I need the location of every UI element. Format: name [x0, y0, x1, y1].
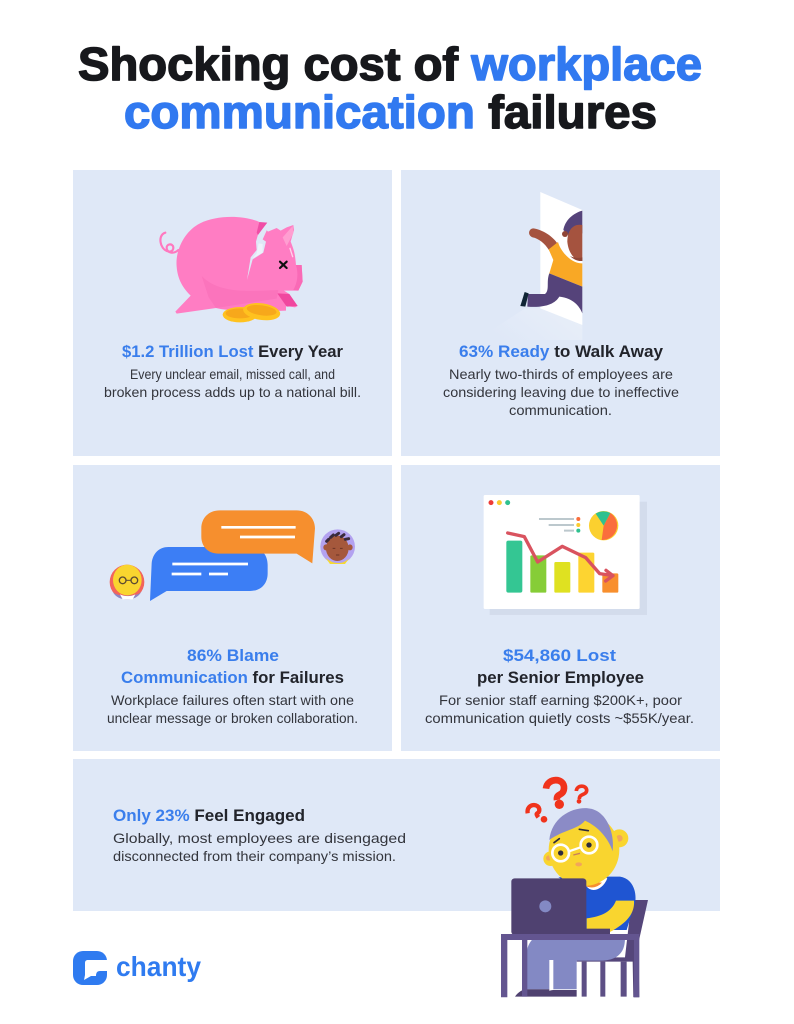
text block [113, 830, 406, 864]
head [610, 829, 628, 847]
heading: per Senior Employee [477, 669, 644, 687]
chair [577, 900, 648, 997]
icon: confused person at laptop [501, 780, 648, 997]
wordmark: chanty [116, 951, 201, 982]
heading [121, 647, 344, 687]
icon: chat logo [73, 951, 108, 985]
heading: $54,860 Lost [503, 647, 617, 665]
legs [526, 938, 625, 989]
text block [425, 692, 694, 726]
icon: dashboard with falling chart [484, 495, 647, 615]
text block: communication. [509, 402, 612, 418]
text block: Nearly two-thirds of employees are [449, 366, 673, 382]
panel: blame communication [73, 465, 392, 751]
text block: considering leaving due to ineffective [443, 384, 679, 400]
icon: chat bubbles with avatars [110, 510, 355, 601]
panel: cost per senior employee [401, 465, 720, 751]
heading: 63% Ready to Walk Away [459, 343, 664, 361]
heading [477, 647, 644, 687]
panel: trillion lost [73, 170, 392, 456]
icon: person leaving through door [477, 192, 582, 340]
torso [558, 877, 636, 930]
title: communication failures [124, 86, 657, 138]
question marks [528, 780, 587, 823]
text block: broken process adds up to a national bill. [104, 384, 361, 400]
text block [443, 366, 679, 418]
heading: 86% Blame [187, 647, 279, 665]
logo: chanty [73, 951, 201, 985]
avatar: yellow [110, 565, 144, 599]
text block: Every unclear email, missed call, and [130, 366, 335, 382]
text block [107, 692, 358, 726]
text block: unclear message or broken collaboration. [107, 710, 358, 726]
heading: $1.2 Trillion Lost Every Year [122, 343, 344, 361]
laptop [511, 878, 610, 935]
text block: disconnected from their company’s mission. [113, 848, 396, 864]
text block: Globally, most employees are disengaged [113, 830, 406, 846]
title: Shocking cost of workplace [78, 38, 702, 90]
avatar: brown [320, 529, 355, 564]
text block: For senior staff earning $200K+, poor [439, 692, 682, 708]
heading: Communication for Failures [121, 669, 344, 687]
blue bubble [150, 547, 268, 601]
text block: Workplace failures often start with one [111, 692, 354, 708]
panel: ready to walk away [401, 170, 720, 456]
desk [501, 934, 639, 997]
orange bubble [201, 510, 315, 563]
text block [104, 366, 361, 400]
text block: communication quietly costs ~$55K/year. [425, 710, 694, 726]
heading: Only 23% Feel Engaged [113, 807, 305, 825]
icon: broken piggy bank [160, 217, 303, 323]
title [78, 38, 702, 138]
panel: engagement [73, 759, 720, 911]
